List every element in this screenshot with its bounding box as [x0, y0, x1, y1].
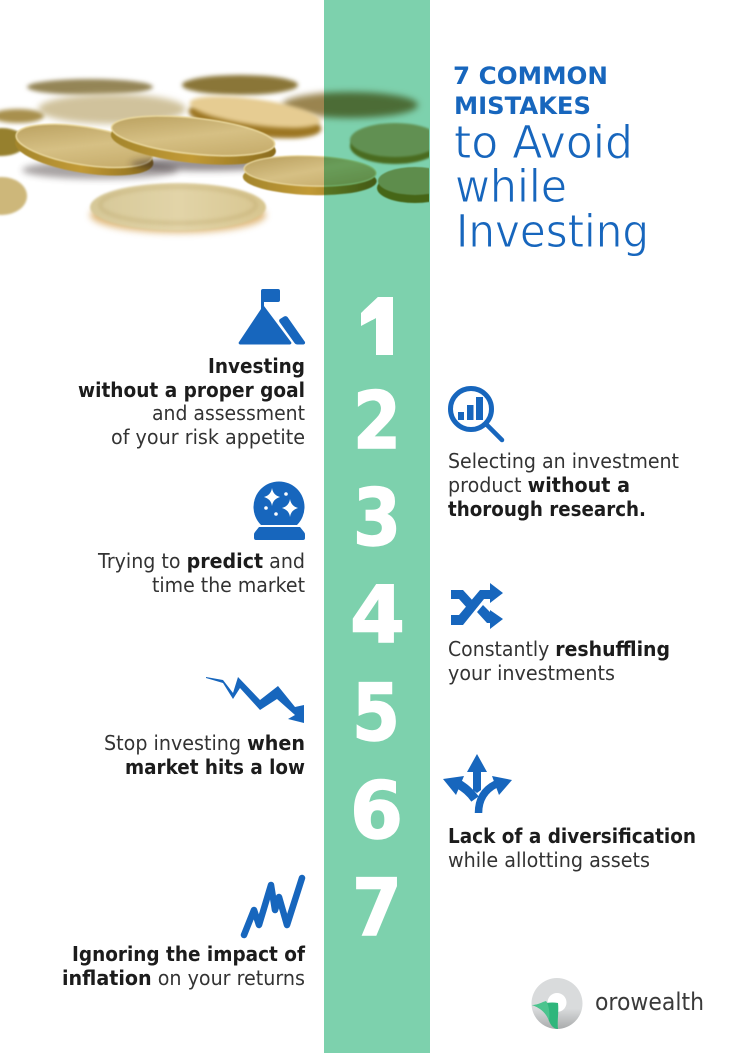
text: goal: without a proper goal — [78, 378, 305, 402]
logo wordmark: orowealth — [595, 988, 704, 1016]
icon: magnifier with bars — [450, 388, 502, 440]
text: predict — [97, 549, 305, 597]
icon: shuffle arrows — [451, 583, 503, 629]
item 5: market low — [104, 677, 305, 779]
text: reshuffling: your investments — [448, 661, 615, 685]
number 4: 4 — [350, 571, 405, 661]
text: goal: of your risk appetite — [111, 425, 305, 449]
number 1 — [361, 297, 393, 355]
logo: orowealth — [532, 978, 704, 1029]
item 1: goal — [78, 289, 305, 449]
text: market low: Stop investing when — [104, 731, 305, 755]
numbers 1 to 7 — [352, 297, 402, 936]
text: market low — [104, 731, 305, 779]
title: 7 COMMON — [453, 62, 608, 90]
text: research — [448, 449, 679, 521]
text: reshuffling: Constantly reshuffling — [448, 637, 670, 661]
title: Investing — [456, 205, 649, 258]
number 1: 1 — [352, 284, 403, 374]
photo: gold coins — [0, 75, 453, 233]
text: reshuffling — [448, 637, 670, 685]
item 4: reshuffling — [448, 583, 670, 685]
text: inflation: Ignoring the impact of — [72, 942, 305, 966]
green number band — [324, 0, 430, 1053]
number 6: 6 — [350, 767, 403, 857]
icon: mountain with flag — [239, 289, 305, 344]
title: to Avoid — [454, 116, 633, 169]
text: research: product without a — [448, 473, 630, 497]
icon: falling chart arrow — [206, 677, 304, 723]
item 7: inflation — [62, 878, 305, 990]
text: diversification — [448, 824, 696, 872]
text: market low: market hits a low — [125, 755, 305, 779]
text: diversification: Lack of a diversification — [448, 824, 696, 848]
icon: crystal ball — [254, 481, 305, 540]
text: goal — [78, 354, 305, 449]
item 3: predict — [97, 481, 305, 597]
text: inflation: inflation on your returns — [62, 966, 305, 990]
number 5: 5 — [352, 669, 400, 759]
title — [453, 62, 649, 258]
text: predict: Trying to predict and — [97, 549, 305, 573]
text: goal: Investing — [208, 354, 305, 378]
item 6: diversification — [443, 754, 696, 872]
text: diversification: while allotting assets — [448, 848, 650, 872]
number 2: 2 — [353, 377, 401, 467]
icon: rising chart line — [244, 878, 302, 935]
text: predict: time the market — [152, 573, 305, 597]
number 3: 3 — [353, 474, 401, 564]
title: MISTAKES — [454, 92, 591, 120]
logo mark — [532, 978, 582, 1029]
title: while — [455, 160, 567, 213]
text: inflation — [62, 942, 305, 990]
text: goal: and assessment — [152, 401, 305, 425]
text: research: thorough research. — [448, 497, 646, 521]
icon: three way arrows — [443, 754, 512, 813]
number 7: 7 — [352, 864, 402, 954]
text: research: Selecting an investment — [448, 449, 679, 473]
item 2: research — [448, 388, 679, 521]
